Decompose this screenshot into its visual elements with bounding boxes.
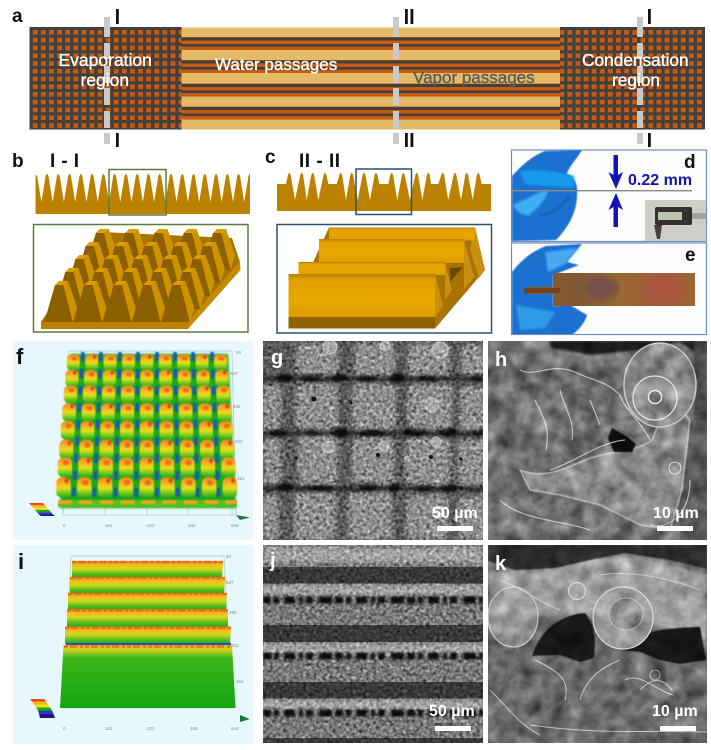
scale label: 10 µm	[653, 505, 699, 522]
label: evaporation region: region	[80, 70, 129, 90]
pin-fin blocks	[263, 343, 485, 540]
panel i: 3D profile of grooves	[13, 545, 253, 744]
axis tick labels: 485	[233, 404, 241, 409]
label: condensation region: Condensation	[582, 50, 689, 70]
heading I - I: I - I	[50, 151, 79, 172]
ball at top	[624, 343, 696, 427]
section line I left	[104, 17, 110, 144]
SEM background	[263, 341, 483, 540]
surface texture	[263, 545, 483, 743]
SEM background	[488, 545, 707, 743]
scale bar	[657, 526, 693, 531]
surface base	[60, 354, 236, 508]
central tan band	[176, 28, 566, 130]
panel letter e: e	[685, 245, 696, 266]
axis tick labels: 485	[188, 523, 196, 528]
panel letter f: f	[16, 344, 24, 369]
scale label: 50 µm	[429, 703, 475, 720]
dark cavities	[532, 613, 706, 664]
section marks	[116, 9, 651, 147]
label: evaporation region: Evaporation	[58, 50, 152, 70]
panel letter g: g	[271, 347, 283, 369]
panel letter i: i	[18, 549, 24, 574]
photo frame d	[512, 150, 706, 242]
scale bar	[660, 726, 696, 731]
surface texture	[263, 341, 483, 540]
thickness arrows	[608, 155, 623, 227]
pin-fin cross section profile	[36, 174, 250, 214]
axis tick labels: 644	[231, 523, 239, 528]
surface texture	[488, 341, 707, 540]
panel c: section II-II	[265, 147, 492, 333]
axis tick labels: 161	[105, 726, 113, 731]
panel letter h: h	[495, 349, 507, 371]
3D pin-fin array	[41, 229, 240, 329]
colour legend	[30, 699, 55, 718]
label: water passages: Water passages	[215, 55, 337, 74]
label: condensation region: region	[612, 70, 660, 90]
evaporation region grid	[30, 27, 182, 130]
panel j: SEM of groove array	[263, 545, 483, 743]
ridge highlights	[263, 548, 483, 710]
axis arrow	[240, 715, 250, 722]
scale label: 10 µm	[652, 703, 698, 720]
sample edge line	[512, 190, 692, 191]
dark gaps between rows	[263, 372, 484, 492]
plot background	[13, 341, 253, 540]
small pores	[294, 396, 462, 460]
panel g: SEM of pin-fin array	[263, 340, 485, 540]
plot background	[13, 545, 253, 744]
panel letter c: c	[265, 147, 276, 168]
panel d: thickness photo	[512, 150, 706, 242]
scale label: 50 µm	[432, 505, 478, 522]
axis tick labels: 50	[226, 554, 232, 559]
axis tick labels: 323	[235, 439, 243, 444]
axis tick labels: 0	[63, 523, 66, 528]
axis tick labels: 161	[105, 523, 113, 528]
axis tick labels: 323	[147, 523, 155, 528]
panel a: vapor chamber wick schematic	[12, 6, 705, 147]
photo content: gloved hand	[512, 150, 582, 241]
inset: digital caliper	[645, 200, 706, 241]
wrinkle ridges	[500, 369, 690, 530]
panel letter b: b	[12, 151, 24, 172]
SEM background	[488, 341, 707, 540]
axes box	[63, 351, 236, 515]
pore hole	[608, 428, 636, 452]
melt wrinkles	[490, 573, 707, 735]
axis tick labels: 323	[231, 643, 239, 648]
enlarged frame	[277, 224, 492, 333]
selection box	[356, 169, 412, 214]
axis tick labels: 323	[147, 726, 155, 731]
thickness label: 0.22 mm	[628, 172, 692, 189]
passage stripes	[178, 37, 564, 120]
groove ridge strips	[60, 561, 236, 708]
panel letter k: k	[495, 553, 507, 575]
axis tick labels: 0	[63, 726, 66, 731]
selection box	[109, 170, 166, 215]
section line I right	[637, 17, 643, 144]
axis tick labels	[63, 554, 244, 731]
panel f: 3D profile of pin-fin array	[13, 341, 253, 540]
SEM background	[263, 545, 483, 743]
blue valleys	[73, 352, 219, 505]
condensation region grid	[560, 27, 705, 130]
melted particles	[322, 340, 448, 518]
panel b: section I-I	[12, 151, 250, 332]
copper plate with handle	[524, 273, 695, 306]
panel k: SEM close-up of groove	[488, 545, 707, 743]
undercut holes	[263, 600, 483, 713]
photo frame e	[512, 243, 706, 334]
groove cross section profile	[277, 173, 491, 211]
label: vapor passages: Vapor passages	[413, 68, 535, 87]
panel letter j: j	[269, 550, 276, 572]
scale bar	[435, 726, 471, 731]
panel letter a: a	[12, 6, 23, 27]
upper lit ridge	[488, 555, 707, 640]
heading II - II: II - II	[299, 151, 340, 172]
section line II	[393, 17, 399, 144]
axis tick labels: 644	[231, 726, 239, 731]
photo content: gloved hand	[512, 244, 587, 335]
axis tick labels: 485	[190, 726, 198, 731]
scale bar	[437, 526, 473, 531]
axis tick labels: 647	[226, 580, 234, 585]
dark grooves	[263, 567, 483, 743]
panel h: SEM close-up of pin-fin	[488, 341, 707, 540]
panel e: sample photo	[512, 243, 706, 335]
axis tick labels: 50	[236, 350, 242, 355]
axis tick labels: 485	[229, 610, 237, 615]
surface texture	[488, 545, 707, 743]
axis tick labels	[63, 350, 245, 528]
axis tick labels: 647	[230, 371, 238, 376]
smooth limb of melted metal	[518, 414, 692, 532]
dark top band	[488, 545, 707, 570]
axis tick labels: 161	[237, 476, 245, 481]
small sphere	[669, 462, 681, 474]
lumps	[488, 582, 653, 649]
panel letter d: d	[684, 152, 696, 173]
axes box	[63, 556, 232, 708]
colour legend	[29, 503, 55, 516]
ragged peaks	[64, 562, 232, 646]
dark background corners	[550, 341, 707, 540]
axis arrow	[236, 515, 250, 520]
axis tick labels: 161	[236, 679, 244, 684]
surface bumps	[56, 354, 237, 507]
3D groove structure	[288, 228, 485, 328]
enlarged frame	[34, 224, 248, 332]
